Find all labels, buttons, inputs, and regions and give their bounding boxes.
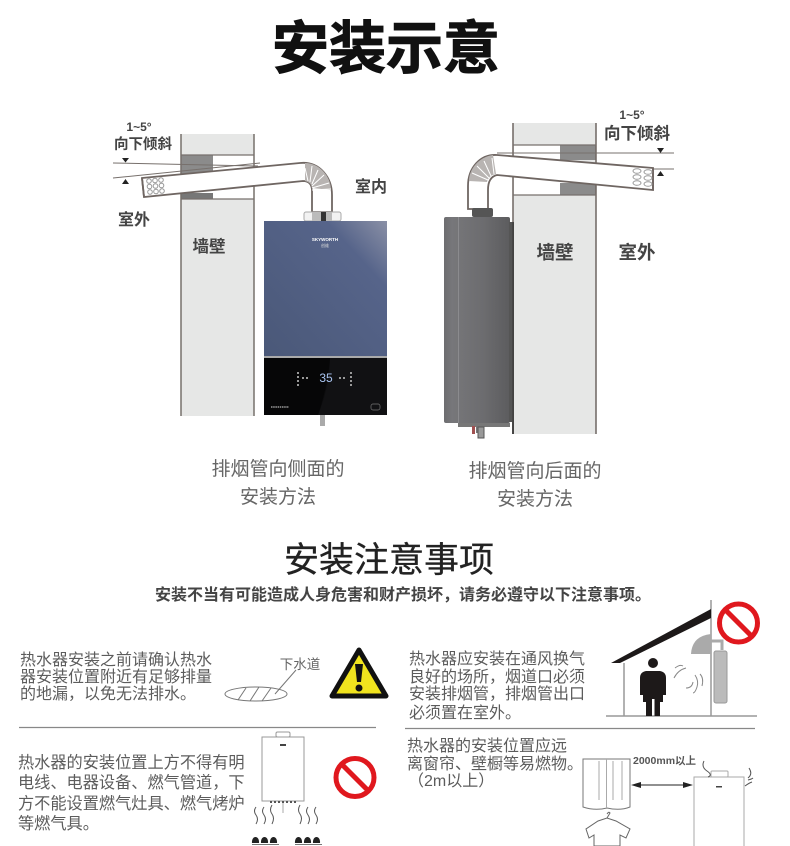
warning subtitle: 安装不当有可能造成人身危害和财产损坏，请务必遵守以下注意事项。	[155, 585, 651, 604]
caption: side flue: 安装方法	[240, 486, 316, 508]
note 3: ventilation: 安装排烟管，排烟管出口	[409, 685, 585, 703]
distance arrow	[631, 754, 697, 788]
note 4: clearance: 离窗帘、壁橱等易燃物。	[407, 754, 583, 773]
caption: rear flue	[468, 460, 602, 510]
note 2: no gas appliances: 等燃气具。	[18, 815, 99, 833]
icon: prohibited	[336, 758, 374, 796]
wall	[181, 134, 254, 416]
icon: heater outline	[694, 761, 753, 846]
heater side view	[444, 217, 513, 438]
icon: drain: 下水道	[280, 657, 320, 672]
note 1: floor drain: 器安装位置附近有足够排量	[20, 668, 212, 686]
icon: shirt on hanger	[586, 812, 630, 846]
label: outdoor: 室外	[118, 210, 150, 229]
water heater front view	[264, 221, 387, 426]
right diagram: rear flue installation: 向下倾斜	[604, 124, 670, 143]
label: wall: 墙壁	[192, 237, 226, 256]
person	[640, 658, 666, 716]
label: wall: 墙壁	[536, 242, 574, 263]
title: 安装示意	[272, 17, 500, 81]
flue pipe	[142, 163, 341, 221]
note 3: ventilation: 必须置在室外。	[409, 704, 521, 722]
note 4: clearance: （2m以上）	[408, 772, 494, 790]
label: indoor: 室内	[355, 177, 387, 196]
brand: SKYWORTH	[312, 237, 338, 242]
caption: rear flue: 安装方法	[497, 488, 573, 510]
note 1: floor drain: 热水器安装之前请确认热水	[20, 651, 212, 669]
label: 1~5 degrees downward: 1~5°	[619, 108, 645, 122]
label: 1~5 degrees downward: 1~5°	[126, 120, 152, 134]
note 4: clearance: 热水器的安装位置应远	[407, 736, 567, 755]
tilt reference lines	[497, 153, 674, 169]
note 2: no gas appliances: 电线、电器设备、燃气管道，下	[18, 774, 245, 792]
note 2: no gas appliances	[18, 732, 374, 844]
flue pipe	[468, 155, 653, 217]
icon: heater with flames	[252, 732, 322, 844]
wall	[513, 123, 596, 434]
note 2: no gas appliances: 方不能设置燃气灶具、燃气烤炉	[18, 795, 245, 813]
tilt arrows	[122, 158, 129, 184]
tilt reference lines	[113, 163, 260, 178]
caption: side flue: 排烟管向侧面的	[211, 458, 345, 480]
tilt arrows	[657, 148, 664, 176]
caption: rear flue: 排烟管向后面的	[468, 460, 602, 482]
section heading: 安装注意事项	[284, 541, 494, 580]
icon: warning triangle	[332, 650, 386, 696]
left diagram: side flue installation	[113, 120, 387, 416]
note 1: floor drain	[20, 650, 386, 703]
note 2: no gas appliances: 热水器的安装位置上方不得有明	[18, 754, 245, 772]
note 3: ventilation: 良好的场所，烟道口必须	[409, 668, 585, 686]
water heater front view: 创维	[321, 242, 329, 248]
distance arrow: 2000mm以上	[633, 754, 697, 767]
left diagram: side flue installation: 向下倾斜	[114, 135, 172, 153]
note 3: ventilation	[409, 600, 758, 722]
caption: side flue	[211, 458, 345, 508]
icon: drain	[225, 657, 320, 701]
label: outdoor: 室外	[618, 242, 656, 263]
icon: house with person	[606, 600, 757, 716]
right diagram: rear flue installation	[444, 108, 674, 438]
note 1: floor drain: 的地漏，以免无法排水。	[20, 685, 196, 703]
divider left	[19, 726, 376, 728]
display: 35	[319, 371, 333, 385]
note 3: ventilation: 热水器应安装在通风换气	[409, 649, 585, 668]
note 4: clearance	[407, 736, 753, 846]
icon: curtain	[583, 759, 630, 809]
divider right	[405, 728, 755, 730]
icon: prohibited	[720, 604, 758, 642]
